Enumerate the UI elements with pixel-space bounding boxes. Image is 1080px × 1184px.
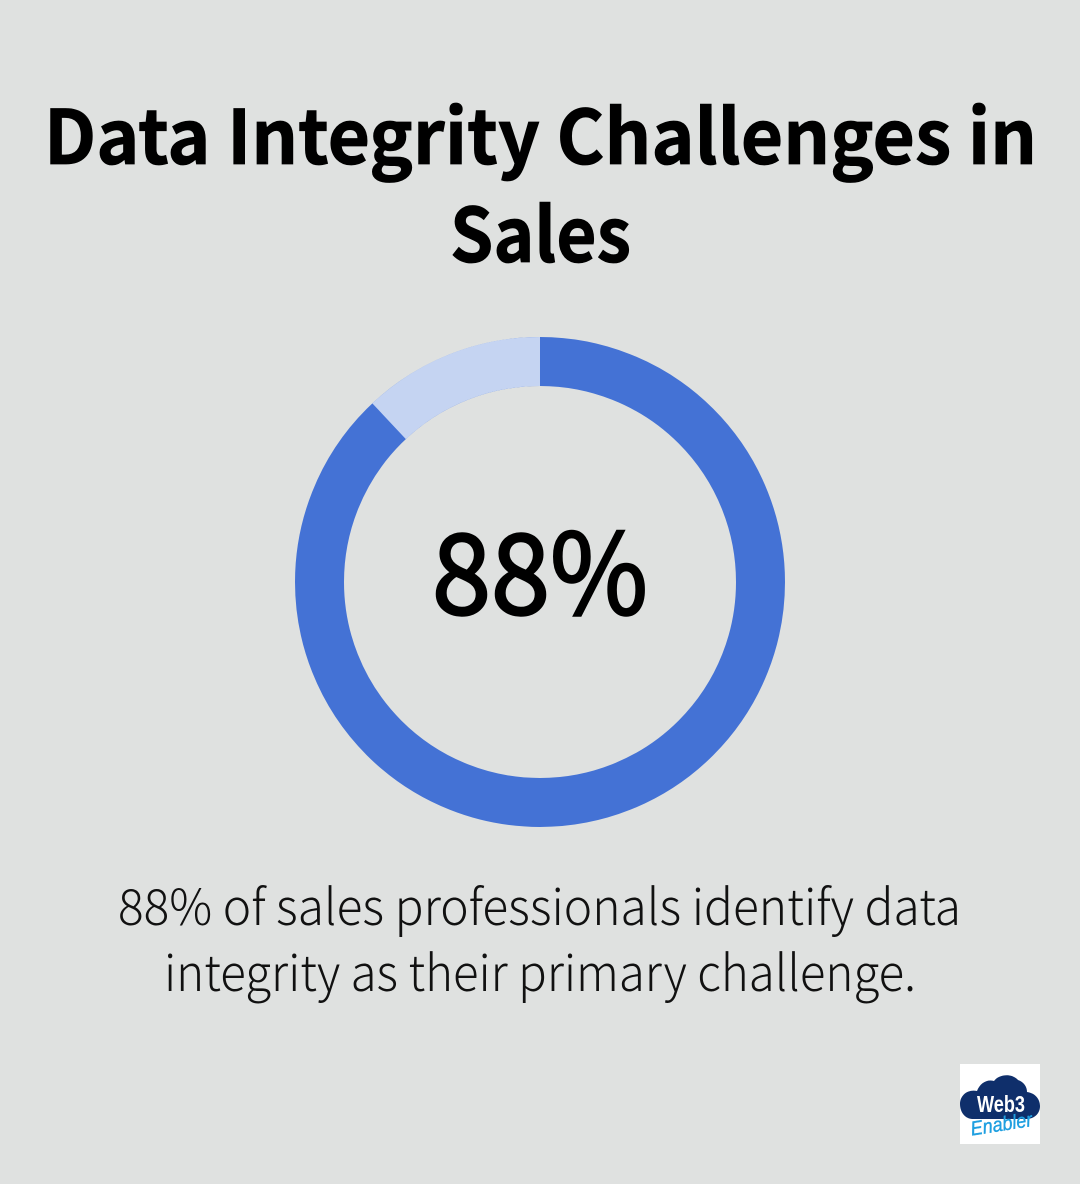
logo: Web3 Enabler xyxy=(960,1064,1040,1144)
logo script: Enabler xyxy=(969,1109,1035,1141)
description text: 88% of sales professionals identify data xyxy=(118,868,961,940)
title: Data Integrity Challenges in xyxy=(44,77,1037,186)
title: Sales xyxy=(450,175,631,284)
logo cloud xyxy=(960,1075,1040,1119)
logo wordmark: Web3 xyxy=(977,1091,1025,1117)
donut center value: 88% xyxy=(432,485,648,646)
donut chart: 88% xyxy=(320,362,760,802)
description text xyxy=(118,868,961,1006)
description text: integrity as their primary challenge. xyxy=(164,934,916,1006)
title xyxy=(44,77,1037,284)
